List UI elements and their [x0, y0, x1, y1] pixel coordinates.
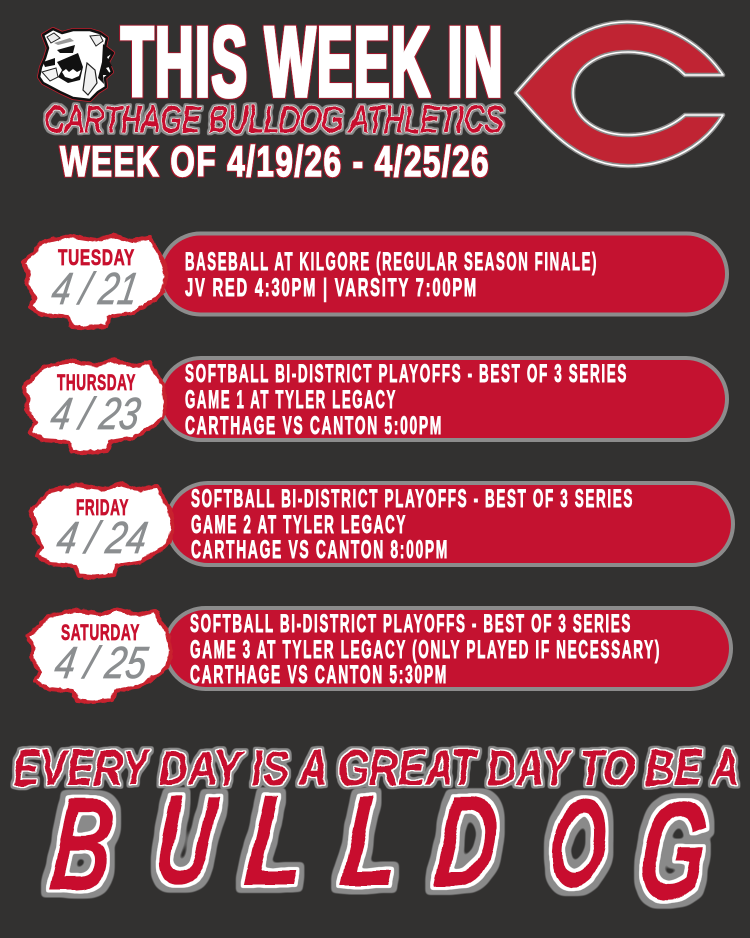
date badge: Friday: 4 / 24: [53, 512, 151, 563]
text: Thursday details: GAME 1 AT TYLER LEGACY: [185, 386, 397, 414]
icon: bulldog mascot: [39, 29, 113, 100]
icon: Carthage C logo: [516, 22, 723, 166]
text: Saturday details: CARTHAGE VS CANTON 5:30PM: [190, 661, 448, 689]
slogan: BULLDOG: G: [633, 771, 713, 929]
text: Friday details: CARTHAGE VS CANTON 8:00PM: [191, 536, 449, 564]
date badge: Saturday: 4 / 25: [51, 637, 152, 688]
panel: Friday game: [30, 483, 733, 577]
panel: Tuesday game: [23, 234, 727, 328]
text: Friday details: GAME 2 AT TYLER LEGACY: [191, 511, 407, 539]
pill: Friday details: [167, 483, 733, 565]
date badge: Tuesday: 4 / 21: [48, 263, 142, 314]
slogan: BULLDOG: L: [241, 769, 311, 914]
slogan: BULLDOG: O: [546, 774, 610, 913]
subtitle: Carthage Bulldog Athletics: CARTHAGE BULLDOG ATHLETICS: [45, 99, 503, 140]
date badge: Thursday: 4 / 23: [47, 388, 144, 439]
text: Tuesday details: [185, 248, 598, 302]
date range heading: WEEK OF 4/19/26 - 4/25/26: [60, 138, 490, 186]
slogan: BULLDOG: D: [430, 769, 504, 914]
text: Thursday details: CARTHAGE VS CANTON 5:00PM: [185, 412, 443, 440]
date badge: Friday: [30, 484, 173, 577]
slogan: BULLDOG: [46, 767, 713, 929]
slogan: BULLDOG: U: [150, 767, 222, 913]
date badge: Thursday: THURSDAY: [57, 370, 136, 395]
date badge: Tuesday: TUESDAY: [58, 245, 135, 270]
date badge: Saturday: SATURDAY: [61, 620, 140, 645]
slogan: BULLDOG: B: [46, 770, 120, 918]
slogan: BULLDOG: L: [337, 768, 405, 913]
date badge: Thursday: [23, 360, 166, 453]
pill: Tuesday details: [160, 234, 727, 314]
date badge: Friday: FRIDAY: [76, 495, 129, 520]
text: Thursday details: [185, 360, 628, 440]
pill: Saturday details: [165, 608, 731, 689]
text: Friday details: [191, 485, 634, 564]
panel: Thursday game: [23, 358, 727, 453]
date badge: Tuesday: [23, 235, 166, 328]
text: Tuesday details: JV RED 4:30PM | VARSITY 7:00PM: [185, 274, 478, 302]
pill: Thursday details: [160, 358, 727, 440]
panel: Saturday game: [28, 608, 731, 702]
date badge: Saturday: [28, 609, 171, 702]
text: Saturday details: [190, 610, 661, 689]
